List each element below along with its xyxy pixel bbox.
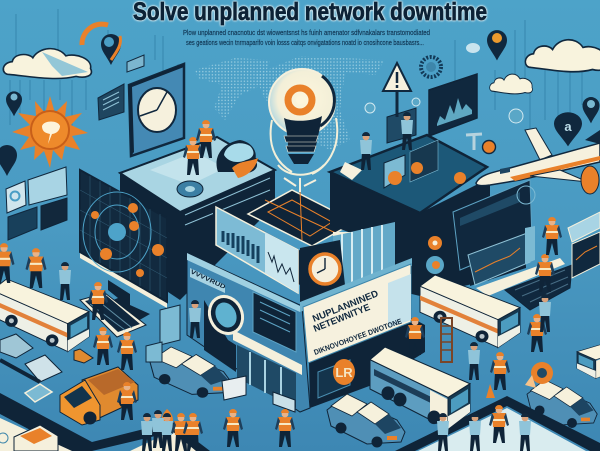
- cream floor right: [418, 408, 586, 451]
- blue car right: [527, 380, 597, 428]
- top right map panel: [568, 212, 600, 242]
- small circle icons: [365, 98, 523, 123]
- blue car center: [150, 347, 232, 398]
- person at screen: [401, 112, 413, 150]
- floor dark border right: [395, 396, 600, 451]
- small cloud right: [490, 74, 532, 94]
- pin dark left: [0, 145, 17, 176]
- workers group: [0, 217, 562, 451]
- cloud highlight: [42, 52, 88, 76]
- small data chart screen: [429, 74, 477, 136]
- monitor far right: [572, 232, 600, 278]
- cloud right: [525, 40, 600, 72]
- rain and vertical lines: [10, 9, 582, 130]
- cream banner: [300, 258, 412, 363]
- floor dark border left: [0, 393, 210, 451]
- world map dots: [195, 56, 385, 150]
- white crates: [222, 376, 295, 412]
- cream banner: DIKNOVOHOYEE DWOTONE: [313, 317, 403, 357]
- cloud left: [3, 49, 91, 79]
- server modules left: [0, 334, 62, 382]
- pin with orange arc: [82, 24, 121, 65]
- pin small right: [582, 97, 600, 123]
- left platform block: [120, 137, 275, 300]
- bus left: [0, 279, 89, 352]
- orange rings column: [426, 236, 444, 274]
- pin orange top right: [487, 30, 507, 61]
- blue car bottom: [327, 394, 405, 448]
- large monitor: [80, 170, 167, 322]
- subtitle text: ses geations wecin tnrmaparifo voin losss caitqs onvigatations noatd io cnosihcone bausbasrs...: [186, 38, 424, 47]
- cream banner: NETEWNITYE: [312, 302, 372, 335]
- second person on platform: [196, 120, 216, 158]
- pin left: [6, 91, 22, 116]
- keyboard left: [80, 293, 146, 337]
- center chart panel: [213, 204, 333, 302]
- building blue wall: VVVVRUD: [189, 269, 227, 291]
- cream floor left: [0, 418, 72, 451]
- warning sign: [383, 63, 411, 117]
- rock and fire icon: [217, 140, 258, 178]
- note panel: [98, 84, 124, 120]
- server racks: [146, 305, 180, 362]
- dashboards left: [6, 167, 67, 240]
- fire icon bottom: [162, 409, 173, 429]
- keyboard right: [505, 265, 572, 310]
- pin large right: a: [564, 119, 572, 134]
- central dark top: [248, 178, 355, 246]
- right dark panel with monitors: [453, 180, 535, 286]
- sun icon: [12, 96, 88, 168]
- equipment bottom left: [0, 425, 58, 451]
- dark slab below banner: LR: [335, 365, 353, 380]
- orange truck: [60, 367, 138, 425]
- right platform block: [330, 108, 490, 296]
- orange fire tank on car: [525, 362, 553, 388]
- subtitle text: [183, 28, 430, 47]
- subtitle text: Plow unplanned cnacnotuc dst wiowentsnst hs fuinh amenator sdfvnakalars transtomodiated: [183, 28, 430, 37]
- airplane: [476, 128, 600, 194]
- binders: [333, 222, 395, 292]
- lightbulb: [269, 69, 337, 175]
- magnifier: [203, 291, 249, 372]
- monitor foot right: [476, 258, 565, 296]
- cone and hat icons: [74, 349, 495, 398]
- tablet: [25, 384, 52, 402]
- pin large right: [554, 112, 582, 146]
- building blue wall: [187, 253, 310, 412]
- small cloud top: [466, 43, 480, 53]
- person at desk: [360, 132, 372, 170]
- gear icon: [421, 57, 441, 77]
- orange coin and pipe: [466, 134, 496, 154]
- clock center: [300, 240, 345, 305]
- cream floor center: [130, 431, 196, 451]
- clock panel: [129, 64, 184, 156]
- blue coach: [370, 347, 470, 429]
- dark slab below banner: [309, 318, 425, 408]
- bus center right: [420, 275, 520, 348]
- server icon: [127, 55, 144, 72]
- people on platform: [183, 137, 203, 175]
- cream banner: NUPLANNINED: [311, 288, 380, 325]
- ladder cart: [441, 318, 452, 362]
- van right: [577, 330, 600, 378]
